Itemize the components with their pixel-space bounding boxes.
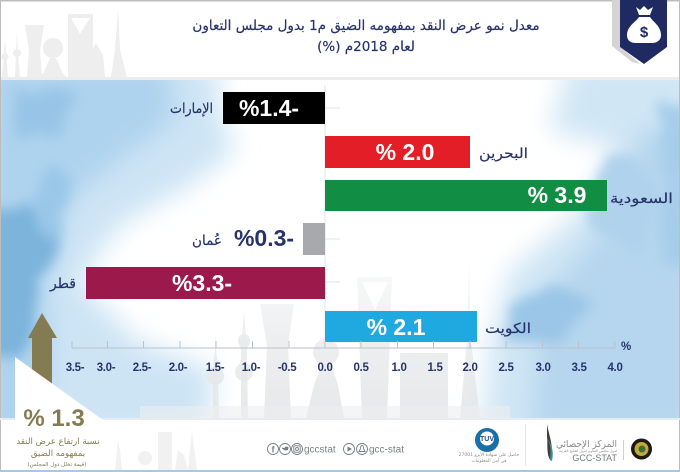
- x axis: 4.0: [607, 362, 623, 374]
- x axis: 2.5-: [133, 362, 152, 374]
- logo: TUV certification: في أمن المعلومات: [471, 457, 507, 464]
- bar: الإمارات: [170, 92, 325, 124]
- title: معدل نمو عرض النقد بمفهومه الضيق م1 بدول مجلس التعاون: [192, 18, 540, 34]
- bar: السعودية: % 3.9: [528, 182, 586, 208]
- callout: 1.3% money supply: [3, 357, 103, 470]
- icon: facebook: f: [272, 444, 276, 454]
- icon: snapchat: [356, 444, 368, 454]
- panel: watercolor chart background: [1, 80, 679, 418]
- logo: TUV certification: TUV: [480, 436, 494, 443]
- logo: GCC-STAT: GCC-STAT: [572, 453, 617, 463]
- skyline: header decoration: [2, 8, 127, 77]
- handle: gcc-stat: gcc-stat: [369, 444, 404, 456]
- footer white band: [0, 418, 680, 472]
- callout: 1.3% money supply: بمفهومه الضيق: [31, 449, 85, 459]
- x axis: 2.0: [462, 362, 478, 374]
- icon: youtube: [344, 444, 354, 454]
- callout: 1.3% money supply: (قيمة تخلل دول المجلس): [28, 462, 86, 468]
- x axis: 0.5: [353, 362, 369, 374]
- bar: قطر: قطر: [49, 276, 76, 292]
- bar: البحرين: [325, 136, 528, 168]
- x axis: 3.5: [571, 362, 587, 374]
- title: [192, 18, 540, 55]
- x axis: 3.0: [535, 362, 551, 374]
- icon: instagram: [292, 444, 302, 454]
- bar: البحرين: البحرين: [479, 146, 528, 162]
- bar: عمان: [192, 223, 325, 255]
- bar: السعودية: السعودية: [610, 191, 673, 207]
- x axis: 3.5-: [66, 362, 85, 374]
- logo: GCC seal: [631, 438, 652, 460]
- bar: الكويت: % 2.1: [367, 314, 426, 340]
- x axis: 3.0-: [97, 362, 116, 374]
- bar: عمان: %0.3-: [234, 225, 294, 251]
- x axis: -0.5: [278, 362, 297, 374]
- x axis: 1.0: [391, 362, 407, 374]
- bar: السعودية: [325, 180, 673, 211]
- skyline: centre background: [206, 277, 478, 418]
- callout: 1.3% money supply: % 1.3: [23, 405, 85, 432]
- logo: TUV certification: حاصل على شهادة الأيزو 27001: [459, 451, 520, 458]
- bar: قطر: %3.3-: [172, 270, 232, 296]
- x axis: 1.5: [427, 362, 443, 374]
- logo: TUV certification: [459, 428, 520, 464]
- bar: الكويت: الكويت: [485, 321, 531, 337]
- title: لعام 2018م (%): [317, 39, 415, 55]
- x axis: 1.5-: [206, 362, 225, 374]
- arrow: olive up arrow: [28, 313, 57, 392]
- x axis: %: [621, 341, 631, 353]
- handle: gccstat: gccstat: [304, 444, 336, 456]
- logo: GCC-STAT: المركز الإحصائي: [556, 439, 617, 450]
- divider: [525, 424, 526, 466]
- bar: الإمارات: %1.4-: [239, 95, 299, 121]
- social handles: [268, 444, 404, 456]
- x axis: 1.0-: [242, 362, 261, 374]
- bar: الإمارات: الإمارات: [170, 101, 213, 117]
- icon: twitter: [280, 444, 290, 454]
- icon: money bag ribbon: $: [640, 24, 649, 41]
- callout: 1.3% money supply: نسبة ارتفاع عرض النقد: [16, 437, 100, 447]
- x axis: [66, 341, 631, 374]
- x axis: 2.5: [498, 362, 514, 374]
- bar: الكويت: [325, 311, 531, 342]
- icon: money bag ribbon: [612, 0, 667, 64]
- bar: قطر: [49, 267, 325, 299]
- x axis: 2.0-: [169, 362, 188, 374]
- logo: GCC-STAT: لدول مجلس التعاون لدول الخليج العربية: [559, 449, 617, 453]
- logo: GCC-STAT: [547, 424, 624, 463]
- axis guide lines: [325, 85, 340, 348]
- x axis: 0.0: [317, 362, 333, 374]
- skyline: footer decoration: [115, 428, 197, 470]
- bar: البحرين: % 2.0: [376, 139, 434, 165]
- bar: عمان: عُمان: [192, 233, 222, 249]
